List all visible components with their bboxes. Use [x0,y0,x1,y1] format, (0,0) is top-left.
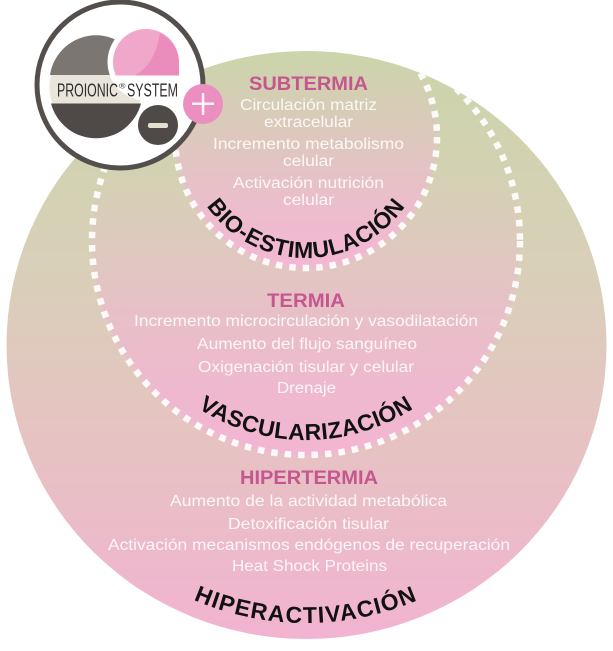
icon: pink disc [113,29,179,76]
text block: subtermia effects: extracelular [264,114,353,131]
heading: termia: TERMIA [267,291,345,312]
text block: subtermia effects [213,97,404,209]
text block: hipertermia effects: Activación mecanismos endógenos de recuperación [108,537,510,554]
text block: termia effects: Oxigenación tisular y celular [198,359,414,376]
text block: hipertermia effects: Aumento de la actividad metabólica [170,493,447,510]
text block: hipertermia effects: Heat Shock Proteins [232,558,387,575]
text block: subtermia effects: Incremento metabolismo [213,136,404,153]
icon: plus [183,84,223,124]
text block: termia effects: Aumento del flujo sanguíneo [197,336,417,353]
curved label: hiperactivación: HIPERACTIVACIÓN [194,586,416,623]
icon: grey half-disc [50,24,184,138]
text block: termia effects [134,313,478,397]
text block: termia effects: Incremento microcirculación y vasodilatación [134,313,478,330]
logo wordmark: SYSTEM [127,80,178,100]
heading: subtermia: SUBTERMIA [249,74,368,95]
text block: hipertermia effects [108,493,510,575]
heading: hipertermia: HIPERTERMIA [240,468,378,489]
text block: subtermia effects: Circulación matriz [240,97,377,114]
text block: hipertermia effects: Detoxificación tisular [228,516,389,533]
panel: middle circle, vascularización [88,90,524,458]
logo wordmark: PROIONIC [57,80,118,100]
text block: subtermia effects: celular [283,192,334,209]
text block: subtermia effects: Activación nutrición [233,175,384,192]
logo: proionic system [37,2,223,168]
icon: minus [138,105,178,145]
curved label: bio-estimulación: BIO-ESTIMULACIÓN [207,197,404,258]
logo wordmark: ® [119,82,126,90]
text block: termia effects: Drenaje [277,380,336,397]
text block: subtermia effects: celular [283,153,334,170]
curved label: vascularización: VASCULARIZACIÓN [203,394,412,440]
panel: inner circle, bio-estimulación [172,73,440,272]
